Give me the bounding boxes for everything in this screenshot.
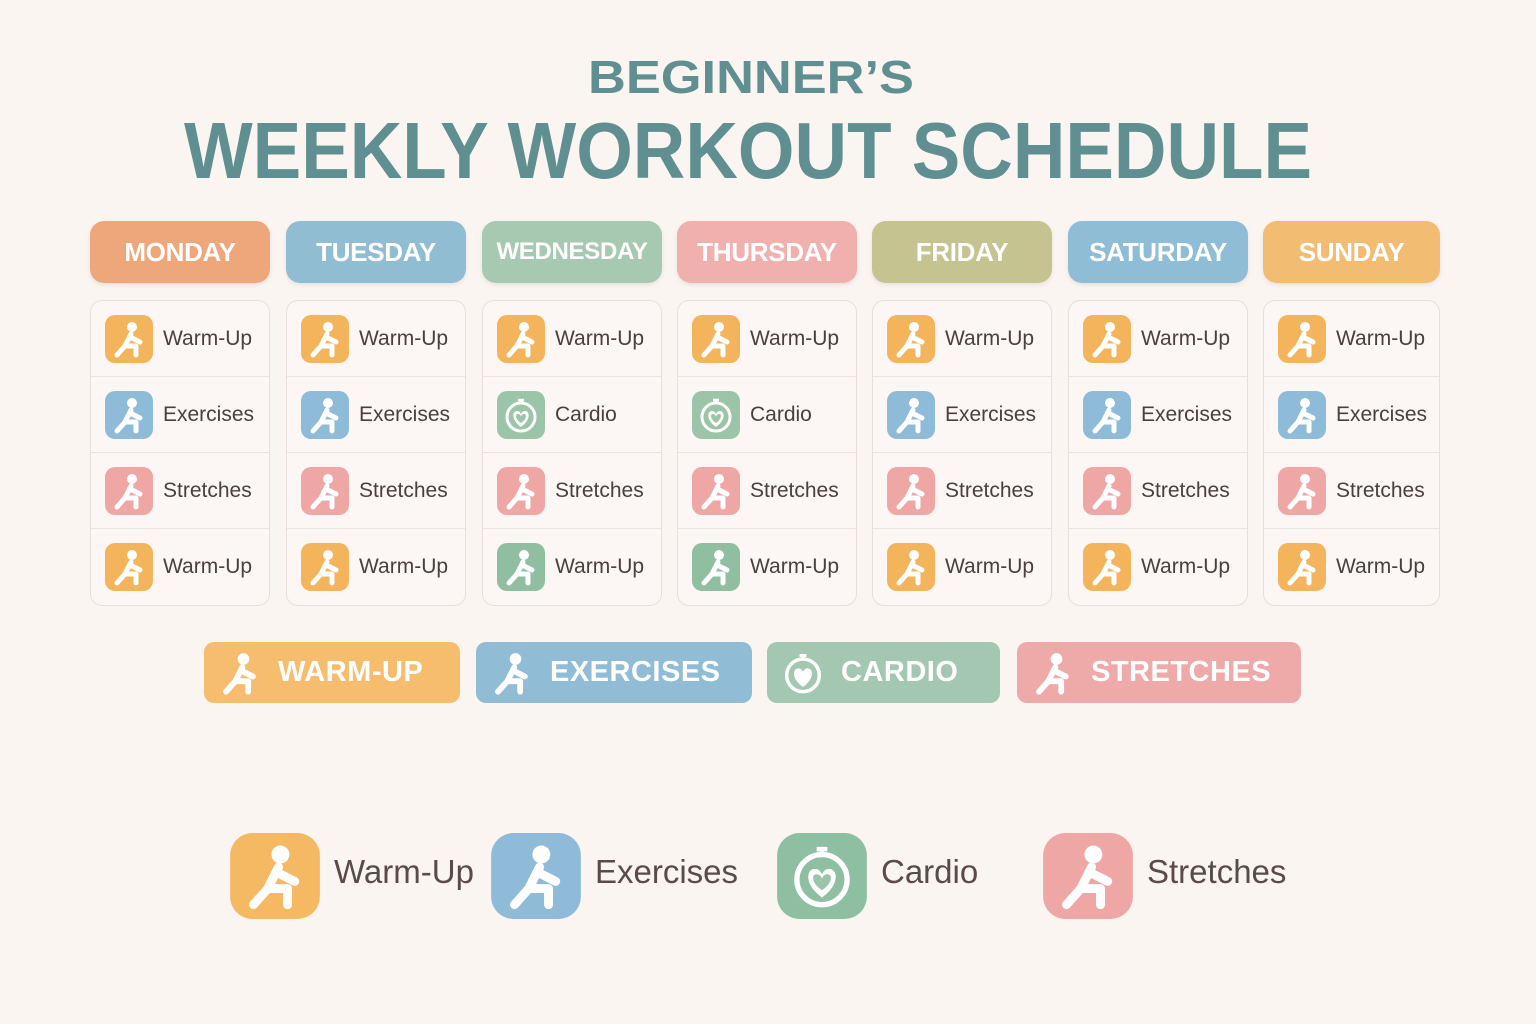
header: thursday — [677, 221, 857, 283]
header: tuesday: TUESDAY — [316, 237, 436, 267]
card: sunday: Warm-Up — [1336, 326, 1425, 350]
pill: warm-up — [204, 642, 460, 703]
legend — [230, 833, 1286, 919]
day headers — [90, 221, 1440, 286]
header: sunday: SUNDAY — [1299, 237, 1404, 267]
card: wednesday: Warm-Up — [555, 326, 644, 350]
card: sunday: Exercises — [1336, 402, 1427, 426]
card: wednesday: Stretches — [555, 478, 644, 502]
card: sunday — [1263, 300, 1440, 606]
pill: stretches: STRETCHES — [1091, 656, 1271, 688]
header: wednesday — [482, 221, 662, 283]
pill: cardio — [767, 642, 1000, 703]
legend: warm-up: Warm-Up — [334, 853, 474, 890]
card: monday: Warm-Up — [163, 555, 252, 578]
header: saturday: SATURDAY — [1089, 237, 1227, 267]
card: monday: Exercises — [163, 402, 254, 426]
card: wednesday: Cardio — [555, 402, 617, 426]
header: sunday — [1263, 221, 1440, 283]
pill: exercises: EXERCISES — [550, 656, 720, 688]
pill: stretches — [1017, 642, 1301, 703]
card: saturday: Exercises — [1141, 402, 1232, 426]
header: friday — [872, 221, 1052, 283]
card: saturday — [1068, 300, 1248, 606]
header: friday: FRIDAY — [916, 237, 1008, 267]
card: tuesday: Warm-Up — [359, 555, 448, 578]
card: friday: Warm-Up — [945, 555, 1034, 578]
card: tuesday: Exercises — [359, 402, 450, 426]
legend: cardio: Cardio — [881, 853, 978, 890]
pill: exercises — [476, 642, 752, 703]
card: thursday: Stretches — [750, 478, 839, 502]
card: friday: Exercises — [945, 402, 1036, 426]
header: monday — [90, 221, 270, 283]
card: tuesday — [286, 300, 466, 606]
card: tuesday: Stretches — [359, 478, 448, 502]
card: wednesday — [482, 300, 662, 606]
category pills — [204, 642, 1301, 703]
card: saturday: Warm-Up — [1141, 326, 1230, 350]
header: saturday — [1068, 221, 1248, 283]
card: thursday: Cardio — [750, 402, 812, 426]
card: friday: Stretches — [945, 478, 1034, 502]
header: thursday: THURSDAY — [697, 237, 837, 267]
card: friday — [872, 300, 1052, 606]
card: tuesday: Warm-Up — [359, 326, 448, 350]
legend: warm-up — [230, 833, 474, 919]
card: thursday: Warm-Up — [750, 326, 839, 350]
card: friday: Warm-Up — [945, 326, 1034, 350]
card: monday: Stretches — [163, 478, 252, 502]
card: saturday: Stretches — [1141, 478, 1230, 502]
subtitle: beginner's: BEGINNER’S — [588, 51, 914, 103]
card: thursday: Warm-Up — [750, 555, 839, 578]
header: tuesday — [286, 221, 466, 283]
pill: warm-up: WARM-UP — [278, 656, 423, 688]
header: wednesday: WEDNESDAY — [496, 238, 648, 265]
legend: exercises: Exercises — [595, 853, 738, 890]
pill: cardio: CARDIO — [841, 656, 958, 688]
title — [184, 51, 1312, 190]
card: sunday: Stretches — [1336, 478, 1425, 502]
card: saturday: Warm-Up — [1141, 555, 1230, 578]
header: monday: MONDAY — [124, 237, 236, 267]
card: thursday — [677, 300, 857, 606]
card: monday — [90, 300, 270, 606]
legend: exercises — [491, 833, 738, 919]
card: sunday: Warm-Up — [1336, 555, 1425, 578]
legend: stretches — [1043, 833, 1286, 919]
legend: cardio — [777, 833, 978, 919]
schedule cards — [90, 300, 1440, 606]
legend: stretches: Stretches — [1147, 853, 1286, 890]
card: monday: Warm-Up — [163, 326, 252, 350]
card: wednesday: Warm-Up — [555, 555, 644, 578]
